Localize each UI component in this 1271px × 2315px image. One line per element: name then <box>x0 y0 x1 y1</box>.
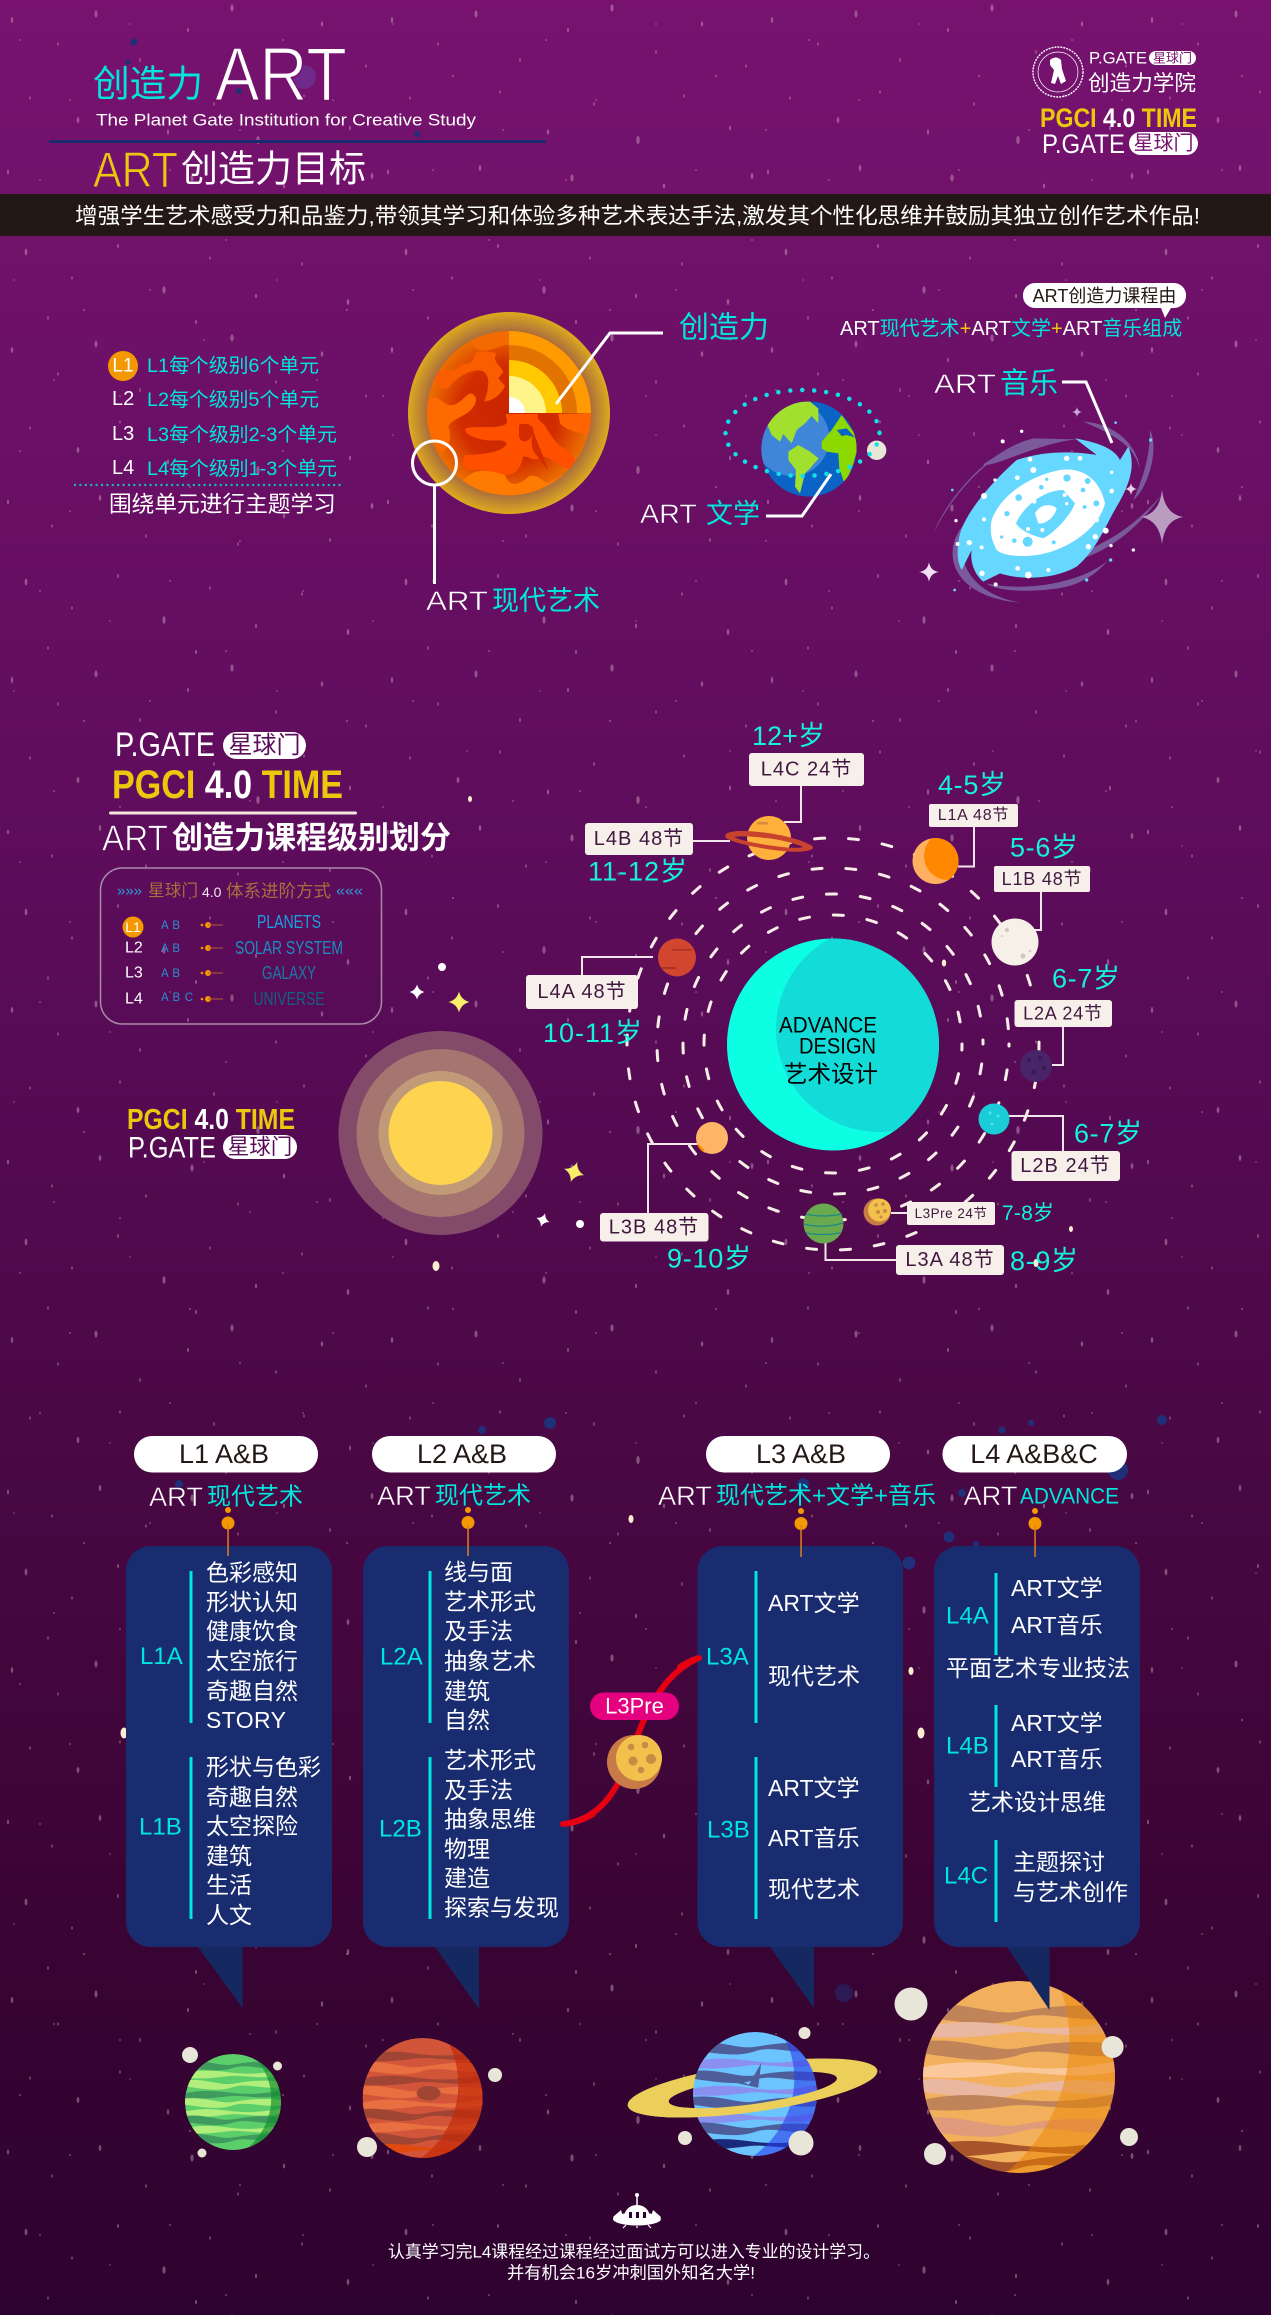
row L2: L2 <box>125 940 143 956</box>
column L1: 现代艺术 <box>207 1484 303 1510</box>
level unit legend: L3每个级别2-3个单元 <box>147 424 337 446</box>
row L2: SOLAR SYSTEM <box>235 938 343 958</box>
panel: L1: 形状认知 <box>206 1589 298 1615</box>
closing note: 认真学习完L4课程经过课程经过面试方可以进入专业的设计学习。 <box>388 2242 880 2262</box>
age labels: 4-5岁 <box>938 770 1006 800</box>
panel: L3 <box>698 1546 903 1947</box>
column L2: 现代艺术 <box>435 1482 531 1510</box>
panel: L1: L1A <box>140 1643 183 1670</box>
row L2 <box>125 938 343 958</box>
title: 创造力 ART: ART <box>215 32 347 118</box>
icon: ufo <box>613 2193 661 2228</box>
heading: ART 创造力课程级别划分: 创造力课程级别划分 <box>172 820 451 856</box>
age labels: 6-7岁 <box>1052 964 1120 994</box>
row L4: L4 <box>125 990 143 1008</box>
panel: L2: L2A <box>380 1644 423 1670</box>
earth with moon <box>726 390 886 497</box>
panel: L4 <box>934 1546 1140 2010</box>
row L2: A B <box>161 943 180 955</box>
column L1 <box>126 1436 332 1947</box>
planet L4C with label: L4B 48节 <box>594 827 684 850</box>
panel: L4: L4B <box>946 1732 989 1760</box>
panel: L1: 形状与色彩 <box>206 1754 321 1780</box>
panel: L1: 太空探险 <box>206 1813 298 1839</box>
logo: institute emblem <box>1033 47 1196 97</box>
panel: L2: L2B <box>379 1816 422 1842</box>
row L1 <box>122 912 321 938</box>
panel: L1: 奇趣自然 <box>206 1784 298 1810</box>
logo: PGCI lower: PGCI 4.0 TIME <box>127 1104 295 1136</box>
heading: P.GATE brand <box>115 726 306 764</box>
column L4 <box>934 1436 1140 2010</box>
age labels: 5-6岁 <box>1010 832 1078 862</box>
panel: L2: 建造 <box>444 1865 490 1891</box>
planet L1A with label: L1A 48节 <box>938 806 1009 824</box>
central planet: advance design: DESIGN <box>799 1034 876 1058</box>
planet L2B with label <box>978 1104 1120 1181</box>
age labels: 10-11岁 <box>543 1018 642 1048</box>
planet L3Pre with label: L3Pre 24节 <box>915 1206 987 1221</box>
planet: blue ringed <box>624 2032 881 2159</box>
planet L4A with label: L4A 48节 <box>537 980 627 1003</box>
age labels: 7-8岁 <box>1002 1202 1054 1225</box>
panel: L1: 生活 <box>206 1872 252 1898</box>
red link end over L2 panel <box>563 1814 593 1824</box>
heading: P.GATE brand: 星球门 <box>228 732 300 759</box>
row L1: A B <box>161 920 180 932</box>
callout: ART 现代艺术 <box>412 441 600 616</box>
panel: L2: 建筑 <box>444 1678 490 1704</box>
red link through L3Pre <box>563 1658 699 1824</box>
panel: L3: ART音乐 <box>768 1825 860 1851</box>
callout: 创造力 <box>556 312 769 404</box>
panel: L1: 建筑 <box>206 1843 252 1869</box>
callout: ART 音乐: 音乐 <box>1000 367 1058 400</box>
heading: PGCI 4.0 TIME: PGCI 4.0 TIME <box>112 763 343 807</box>
column L4: ADVANCE <box>1020 1484 1119 1508</box>
logo: PGCI lower <box>127 1104 297 1164</box>
panel: L4: ART文学 <box>1011 1710 1103 1736</box>
callout: 创造力: 创造力 <box>679 312 769 344</box>
callout: ART 音乐: ART <box>934 369 996 399</box>
sparkles <box>410 963 587 1229</box>
panel: L3: L3B <box>707 1816 750 1844</box>
planet L2A with label <box>1014 1000 1112 1082</box>
callout: ART 文学: ART <box>640 499 697 529</box>
panel: L1: 人文 <box>206 1902 252 1928</box>
planet L3A with label <box>804 1204 1004 1275</box>
age labels <box>543 721 1142 1276</box>
panel: L4: L4C <box>944 1862 988 1890</box>
panel: L1: 奇趣自然 <box>206 1678 298 1704</box>
column L2: L2 A&B <box>417 1439 507 1469</box>
column L4: L4 A&B&C <box>970 1439 1098 1469</box>
column L1: ART <box>149 1482 203 1512</box>
panel: L3: ART文学 <box>768 1590 860 1616</box>
column L3: L3 A&B <box>756 1439 846 1469</box>
panel: L1: 太空旅行 <box>206 1648 298 1674</box>
logo: PGCI 4.0 TIME: P.GATE <box>1042 129 1125 159</box>
row L1: PLANETS <box>257 912 321 932</box>
column L3 <box>658 1436 936 1947</box>
level unit legend: L2 <box>112 388 134 410</box>
panel: L2: 探索与发现 <box>444 1894 559 1920</box>
row L3 <box>125 963 316 983</box>
planet L4A with label <box>526 938 696 1009</box>
column L4: ART <box>964 1481 1018 1511</box>
course composition bubble <box>840 283 1186 340</box>
heading: ART 创造力课程级别划分: ART <box>102 818 168 858</box>
heading: ART 创造力课程级别划分 <box>102 818 451 858</box>
course composition bubble: ART创造力课程由 <box>1033 286 1176 306</box>
column L2: ART <box>377 1481 431 1511</box>
closing note: 并有机会16岁冲刺国外知名大学! <box>507 2264 755 2282</box>
panel: L2 <box>363 1546 569 1947</box>
galaxy <box>919 407 1183 603</box>
moons <box>182 1988 1138 2165</box>
L3Pre pill <box>590 1692 679 1720</box>
panel: L2: 物理 <box>444 1836 490 1862</box>
planet L1B with label: L1B 48节 <box>1002 869 1082 889</box>
panel: L1: L1B <box>139 1814 182 1840</box>
legend title: »»» <box>117 882 142 900</box>
panel: L1: 色彩感知 <box>206 1560 298 1586</box>
panel: L2: 及手法 <box>444 1618 513 1644</box>
logo: institute emblem: 创造力学院 <box>1088 70 1196 96</box>
panel: L4: 主题探讨 <box>1013 1849 1105 1875</box>
panel: progression legend <box>100 868 382 1024</box>
row L4 <box>125 989 324 1009</box>
title: 创造力 ART: The Planet Gate Institution for Creative Study <box>96 110 477 130</box>
legend title: 体系进阶方式 <box>226 881 331 901</box>
title: 创造力 ART <box>93 32 477 130</box>
central planet: advance design: ADVANCE <box>779 1012 877 1038</box>
age labels: 12+岁 <box>752 721 825 751</box>
panel: L4: 与艺术创作 <box>1013 1879 1128 1905</box>
panel: L4: 艺术设计思维 <box>968 1789 1106 1815</box>
level unit legend <box>75 351 340 517</box>
level unit legend: L3 <box>112 423 134 445</box>
planet: red <box>362 2038 483 2158</box>
L3Pre pill: L3Pre <box>605 1694 664 1718</box>
callout: ART 文学: 文学 <box>706 499 760 529</box>
planet L2A with label: L2A 24节 <box>1023 1004 1103 1024</box>
logo: PGCI lower: P.GATE <box>128 1132 216 1164</box>
planet: green <box>185 2054 281 2150</box>
ring back <box>624 2047 881 2129</box>
row L1: L1 <box>125 919 141 935</box>
row L3: A B <box>161 968 180 980</box>
central planet: advance design: 艺术设计 <box>784 1061 878 1087</box>
level unit legend: 围绕单元进行主题学习 <box>109 491 336 517</box>
panel: L3: L3A <box>706 1644 749 1670</box>
age labels: 9-10岁 <box>667 1244 751 1274</box>
panel: L2: 艺术形式 <box>444 1588 536 1614</box>
panel: L1 <box>126 1546 332 1947</box>
logo: PGCI 4.0 TIME <box>1040 103 1198 159</box>
panel: L1: 健康饮食 <box>206 1618 298 1644</box>
large yellow sun <box>338 1031 542 1235</box>
planet L2B with label: L2B 24节 <box>1020 1154 1111 1177</box>
orbits <box>627 838 1039 1250</box>
goal banner <box>0 194 1271 236</box>
goal banner: 增强学生艺术感受力和品鉴力,带领其学习和体验多种艺术表达手法,激发其个性化思维并鼓励其独立创作艺术作品! <box>75 204 1200 228</box>
planet L3B with label <box>600 1122 728 1242</box>
panel: L2: 抽象思维 <box>444 1806 536 1832</box>
panel: L4: L4A <box>946 1602 989 1630</box>
panel: L2: 及手法 <box>444 1777 513 1803</box>
column L3: ART <box>658 1481 712 1511</box>
callout: ART 音乐 <box>934 367 1112 443</box>
planet L1A with label <box>912 804 1018 884</box>
planet L3Pre with label <box>864 1198 995 1226</box>
sun cross-section <box>408 312 610 514</box>
central planet: advance design <box>727 938 939 1150</box>
logo: PGCI 4.0 TIME: 星球门 <box>1134 132 1194 154</box>
panel: L4: ART音乐 <box>1011 1746 1103 1772</box>
age labels: 6-7岁 <box>1074 1118 1142 1148</box>
heading: ART 创造力目标: 创造力目标 <box>181 148 366 190</box>
level unit legend: L4 <box>112 457 134 479</box>
column L2 <box>363 1436 569 1947</box>
legend title: 星球门 <box>148 881 198 900</box>
callout: ART 现代艺术: ART <box>426 586 488 616</box>
panel: L4: 平面艺术专业技法 <box>946 1655 1130 1681</box>
panel: L2: 抽象艺术 <box>444 1648 536 1674</box>
age labels: 8-9岁 <box>1010 1246 1078 1276</box>
panel: L2: 艺术形式 <box>444 1747 536 1773</box>
panel: L4: ART文学 <box>1011 1575 1103 1601</box>
planet: orange <box>923 1981 1115 2173</box>
L1 badge <box>108 351 138 381</box>
age labels: 11-12岁 <box>588 856 687 886</box>
tails of panels <box>198 1947 814 2009</box>
planet L4C with label: L4C 24节 <box>761 758 852 780</box>
panel: L3: 现代艺术 <box>768 1663 860 1689</box>
panel: L2: 线与面 <box>444 1559 513 1585</box>
panel: L2: 自然 <box>444 1707 490 1733</box>
callout: ART 现代艺术: 现代艺术 <box>492 586 600 616</box>
planet L3A with label: L3A 48节 <box>905 1248 995 1271</box>
red link end at L3A <box>680 1658 699 1667</box>
planet L3Pre large <box>607 1735 662 1789</box>
level unit legend: L1每个级别6个单元 <box>147 355 319 377</box>
heading: P.GATE brand: P.GATE <box>115 726 215 764</box>
L1 badge: L1 <box>112 356 134 376</box>
legend title: ««« <box>336 882 363 900</box>
level unit legend: L4每个级别1-3个单元 <box>147 458 337 480</box>
logo: institute emblem: 星球门 <box>1153 50 1192 66</box>
level unit legend: L2每个级别5个单元 <box>147 389 319 411</box>
planet L1B with label <box>992 866 1090 966</box>
heading: ART 创造力目标: ART <box>93 142 178 198</box>
panel: L4: ART音乐 <box>1011 1612 1103 1638</box>
ring front <box>628 2070 878 2118</box>
panel: L1: STORY <box>206 1707 286 1733</box>
row L4: A B C <box>161 992 193 1004</box>
legend title: 4.0 <box>202 884 222 900</box>
title: 创造力 ART: 创造力 <box>93 64 203 104</box>
row L3: L3 <box>125 964 143 982</box>
logo: PGCI 4.0 TIME: PGCI 4.0 TIME <box>1040 103 1197 133</box>
course composition bubble: ART现代艺术+ART文学+ART音乐组成 <box>840 317 1182 340</box>
callout: ART 文学 <box>640 474 831 529</box>
column L3: 现代艺术+文学+音乐 <box>716 1482 936 1510</box>
planet L3B with label: L3B 48节 <box>609 1216 699 1238</box>
panel: L3: 现代艺术 <box>768 1876 860 1902</box>
panel: L3: ART文学 <box>768 1775 860 1801</box>
row L3: GALAXY <box>262 963 316 983</box>
closing note <box>388 2242 880 2282</box>
logo: PGCI lower: 星球门 <box>228 1135 292 1159</box>
column L1: L1 A&B <box>179 1439 269 1469</box>
logo: institute emblem: P.GATE <box>1089 48 1147 68</box>
row L4: UNIVERSE <box>254 989 324 1009</box>
heading: ART 创造力目标 <box>93 142 366 198</box>
planet L4C with label <box>585 753 864 860</box>
legend title <box>117 881 363 901</box>
